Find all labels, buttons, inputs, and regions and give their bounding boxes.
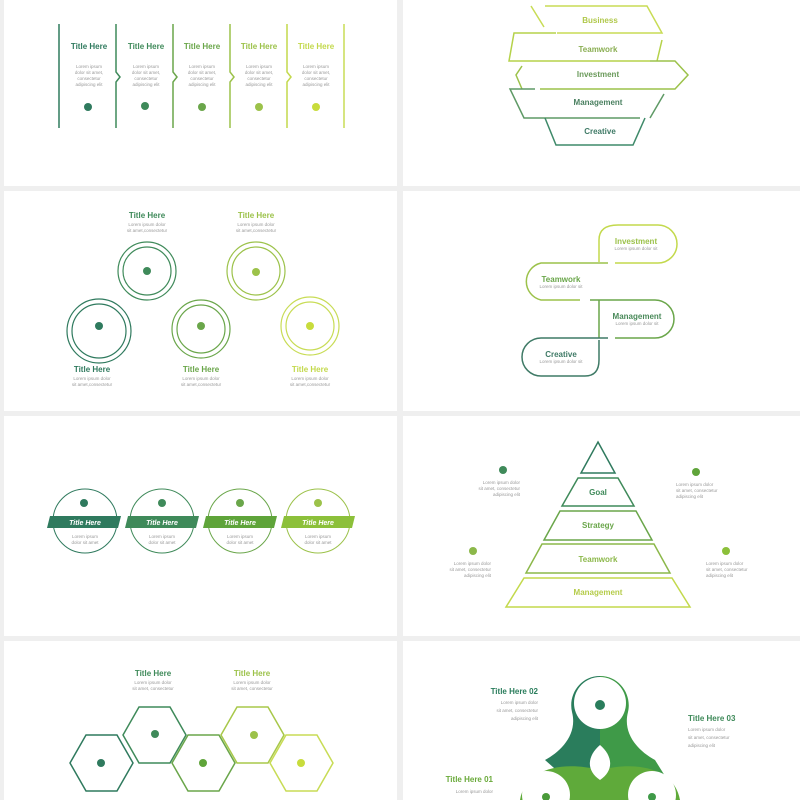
panel: vertical steps: Lorem ipsum	[189, 64, 215, 69]
panel: pyramid: adipiscing elit	[676, 494, 704, 499]
panel: rounded flow: Lorem ipsum dolor sit	[615, 321, 659, 326]
panel: vertical steps: Lorem ipsum	[303, 64, 329, 69]
panel: pyramid: adipiscing elit	[706, 573, 734, 578]
panel: hexagon stack: Creative	[584, 127, 616, 136]
panel: hexagon stack	[403, 0, 800, 186]
panel: banner circles: Lorem ipsum	[72, 534, 98, 539]
panel: vertical steps: Title Here	[298, 42, 335, 51]
panel: trefoil: Title Here 01	[446, 775, 494, 784]
panel: vertical steps: Lorem ipsum	[246, 64, 272, 69]
panel: vertical steps: Lorem ipsum	[133, 64, 159, 69]
panel: wave circles	[4, 191, 397, 411]
panel: vertical steps: consectetur	[77, 76, 101, 81]
panel: rounded flow: Lorem ipsum dolor sit	[614, 246, 658, 251]
panel: banner circles: Title Here	[69, 520, 101, 527]
panel: trefoil: adipiscing elit	[511, 716, 539, 721]
panel: pyramid: sit amet, consectetur	[478, 486, 520, 491]
panel: pyramid: Strategy	[582, 521, 615, 530]
panel: trefoil: adipiscing elit	[688, 743, 716, 748]
panel: pyramid: Goal	[589, 488, 607, 497]
panel: hexagon chain	[4, 641, 397, 800]
panel: hexagon chain: sit amet, consectetur	[132, 686, 174, 691]
panel: hexagon chain: Lorem ipsum dolor	[233, 680, 271, 685]
panel: rounded flow: Investment	[615, 237, 657, 246]
panel: vertical steps: Title Here	[184, 42, 221, 51]
panel: banner circles: dolor sit amet	[304, 540, 332, 545]
panel: pyramid: sit amet, consectetur	[449, 567, 491, 572]
panel: wave circles: Title Here	[238, 211, 275, 220]
panel: wave circles: sit amet,consectetur	[72, 382, 113, 387]
panel: vertical steps: consectetur	[304, 76, 328, 81]
panel: banner circles: Title Here	[146, 520, 178, 527]
panel: rounded flow: Management	[613, 312, 662, 321]
panel: trefoil: Lorem ipsum dolor	[688, 727, 726, 732]
panel: wave circles: Title Here	[183, 365, 220, 374]
panel: pyramid: sit amet, consectetur	[676, 488, 718, 493]
panel: vertical steps: dolor sit amet,	[188, 70, 216, 75]
panel: banner circles: Lorem ipsum	[227, 534, 253, 539]
panel: hexagon stack: Teamwork	[579, 45, 618, 54]
panel: hexagon chain: Lorem ipsum dolor	[134, 680, 172, 685]
panel: vertical steps: Lorem ipsum	[76, 64, 102, 69]
panel: rounded flow: Lorem ipsum dolor sit	[539, 359, 583, 364]
panel: rounded flow: Teamwork	[542, 275, 581, 284]
panel: wave circles: sit amet,consectetur	[236, 228, 277, 233]
panel: wave circles: sit amet,consectetur	[181, 382, 222, 387]
panel: vertical steps: dolor sit amet,	[302, 70, 330, 75]
panel: banner circles: dolor sit amet	[148, 540, 176, 545]
panel: trefoil: Title Here 03	[688, 714, 736, 723]
panel: vertical steps: consectetur	[247, 76, 271, 81]
panel: rounded flow	[403, 191, 800, 411]
panel: banner circles	[4, 416, 397, 636]
panel: pyramid: adipiscing elit	[464, 573, 492, 578]
panel: rounded flow: Lorem ipsum dolor sit	[539, 284, 583, 289]
panel: hexagon chain: Title Here	[135, 669, 172, 678]
panel: rounded flow: Creative	[545, 350, 577, 359]
panel: vertical steps: Title Here	[241, 42, 278, 51]
panel: wave circles: Title Here	[74, 365, 111, 374]
panel: vertical steps: adipiscing elit	[245, 82, 273, 87]
panel: wave circles: Lorem ipsum dolor	[128, 222, 166, 227]
panel: pyramid: Lorem ipsum dolor	[706, 561, 744, 566]
panel: trefoil	[403, 641, 800, 800]
panel: wave circles: Lorem ipsum dolor	[73, 376, 111, 381]
panel: wave circles: Title Here	[292, 365, 329, 374]
panel: vertical steps: adipiscing elit	[188, 82, 216, 87]
panel: wave circles: Lorem ipsum dolor	[291, 376, 329, 381]
panel: banner circles: Title Here	[224, 520, 256, 527]
panel: vertical steps: consectetur	[190, 76, 214, 81]
panel: wave circles: sit amet,consectetur	[290, 382, 331, 387]
panel: banner circles: Lorem ipsum	[305, 534, 331, 539]
panel: banner circles: dolor sit amet	[71, 540, 99, 545]
panel: vertical steps: adipiscing elit	[75, 82, 103, 87]
panel: wave circles: Title Here	[129, 211, 166, 220]
panel: wave circles: sit amet,consectetur	[127, 228, 168, 233]
panel: banner circles: Title Here	[302, 520, 334, 527]
panel: hexagon stack: Management	[574, 98, 623, 107]
panel: banner circles: dolor sit amet	[226, 540, 254, 545]
panel: pyramid: sit amet, consectetur	[706, 567, 748, 572]
panel: vertical steps: Title Here	[71, 42, 108, 51]
panel: vertical steps	[4, 0, 397, 186]
panel: trefoil: Lorem ipsum dolor	[456, 789, 494, 794]
panel: pyramid: adipiscing elit	[493, 492, 521, 497]
panel: vertical steps: dolor sit amet,	[75, 70, 103, 75]
panel: vertical steps: dolor sit amet,	[132, 70, 160, 75]
panel: vertical steps: consectetur	[134, 76, 158, 81]
panel: pyramid: Teamwork	[579, 555, 618, 564]
panel: hexagon chain: sit amet, consectetur	[231, 686, 273, 691]
panel: pyramid: Management	[574, 588, 623, 597]
panel: vertical steps: Title Here	[128, 42, 165, 51]
panel: pyramid: Lorem ipsum dolor	[483, 480, 521, 485]
panel: pyramid	[403, 416, 800, 636]
panel: banner circles: Lorem ipsum	[149, 534, 175, 539]
panel: hexagon stack: Business	[582, 16, 618, 25]
panel: vertical steps: adipiscing elit	[302, 82, 330, 87]
panel: trefoil: Lorem ipsum dolor	[501, 700, 539, 705]
panel: vertical steps: adipiscing elit	[132, 82, 160, 87]
panel: wave circles: Lorem ipsum dolor	[237, 222, 275, 227]
panel: trefoil: sit amet, consectetur	[688, 735, 730, 740]
panel: pyramid: Lorem ipsum dolor	[454, 561, 492, 566]
panel: vertical steps: dolor sit amet,	[245, 70, 273, 75]
panel: trefoil: sit amet, consectetur	[496, 708, 538, 713]
panel: hexagon stack: Investment	[577, 70, 619, 79]
panel: pyramid: Lorem ipsum dolor	[676, 482, 714, 487]
panel: trefoil: Title Here 02	[491, 687, 539, 696]
panel: hexagon chain: Title Here	[234, 669, 271, 678]
panel: wave circles: Lorem ipsum dolor	[182, 376, 220, 381]
